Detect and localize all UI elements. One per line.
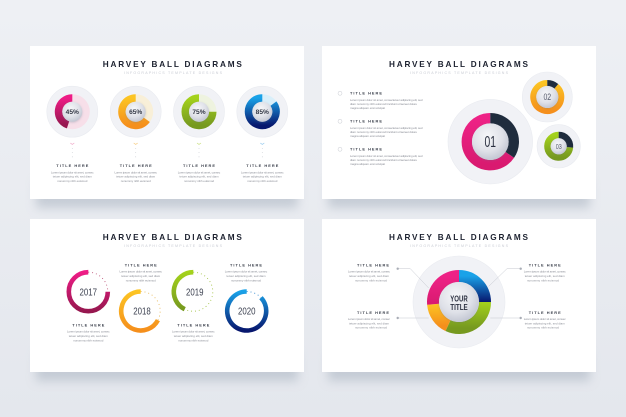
text block 4: Lorem ipsum dolor sit amet, consec [241,170,284,174]
text block 2018 [119,263,162,282]
panel: numbered balls [322,46,596,199]
text block 2017: TITLE HERE [72,322,105,327]
ring: 2020 [227,292,266,331]
text block top right: nonummy nibh euismod [527,278,559,282]
text block 2: TITLE HERE [120,163,152,168]
text block 3: nonummy nibh euismod [184,179,214,183]
ball: 03: 03 [556,142,562,151]
text block 2019: tetuer adipiscing elit, sed diam [174,334,213,338]
ball: 85% [237,86,288,137]
connector lines [396,256,522,348]
panel shadows [36,180,590,381]
text block bottom right: nonummy nibh euismod [527,326,559,330]
ring: 2018 [121,291,160,330]
subheading: INFOGRAPHICS TEMPLATE DESIGNS [410,244,509,248]
text block 4: tetuer adipiscing elit, sed diam [243,175,282,179]
text block top left: tetuer adipiscing elit, sed diam [349,274,390,278]
text block 2019: nonummy nibh euismod [178,338,209,342]
center ball [439,282,479,322]
text block top right: tetuer adipiscing elit, sed diam [525,274,565,278]
subheading: INFOGRAPHICS TEMPLATE DESIGNS [124,71,223,75]
list item 2: diam nonummy nibh euismod tincidunt ut laoreet dolore [350,130,417,134]
text block top right: TITLE HERE [529,263,561,268]
ring: 2018: 2018 [133,306,151,318]
text block bottom right [524,310,566,330]
text block 2019: Lorem ipsum dolor sit amet, consec [172,330,215,334]
list item 3 [338,147,423,166]
text block bottom left: tetuer adipiscing elit, sed diam [349,321,390,325]
ball: 65% [110,86,161,137]
text block 2: nonummy nibh euismod [121,179,151,183]
center ball: YOUR [450,294,468,304]
text block 3 [178,163,221,183]
text block bottom left: TITLE HERE [357,310,389,315]
text block bottom left: nonummy nibh euismod [355,326,387,330]
text block 2019: TITLE HERE [177,322,210,327]
text block 4: TITLE HERE [246,163,279,168]
subheading: INFOGRAPHICS TEMPLATE DESIGNS [124,244,223,248]
ball: 45% [47,86,98,137]
heading: HARVEY BALL DIAGRAMS [389,233,529,242]
list item 2: magna aliquam erat volutpat [350,134,385,138]
list item 1: diam nonummy nibh euismod tincidunt ut laoreet dolore [350,102,417,106]
text block 2020: tetuer adipiscing elit, sed diam [226,274,266,278]
text block 2020 [225,263,268,282]
text block bottom right: Lorem ipsum dolor sit amet, consec [524,317,566,321]
text block 2: Lorem ipsum dolor sit amet, consec [114,170,157,174]
text block top left: nonummy nibh euismod [355,278,387,282]
text block top right [524,263,566,282]
text block 2018: Lorem ipsum dolor sit amet, consec [119,270,162,274]
heading: HARVEY BALL DIAGRAMS [103,60,242,69]
ring: 2019 [174,272,213,311]
text block 2 [114,163,157,183]
ball: 01: 01 [485,134,496,151]
list item 3: TITLE HERE [350,147,382,152]
list item 1 [338,91,423,110]
text block 4: nonummy nibh euismod [247,179,278,183]
ball: 75% [174,86,224,137]
list item 1: TITLE HERE [350,91,382,96]
ring: 2019: 2019 [186,287,204,298]
ball: 65%: 65% [129,109,143,116]
text block 2018: TITLE HERE [125,263,157,268]
text block 2020: Lorem ipsum dolor sit amet, consec [225,270,268,274]
text block 4 [241,163,284,183]
list item 3: magna aliquam erat volutpat [350,162,385,166]
list item 3: diam nonummy nibh euismod tincidunt ut laoreet dolore [350,158,417,162]
panel: segmented ball [322,219,596,372]
ball: 85%: 85% [256,109,269,116]
text block 2017: nonummy nibh euismod [73,338,104,342]
text block bottom left [348,310,391,330]
text block 3: TITLE HERE [183,163,215,168]
text block 1: nonummy nibh euismod [57,179,88,183]
text block top left: Lorem ipsum dolor sit amet, consec [348,270,391,274]
text block 2020: nonummy nibh euismod [231,278,261,282]
text block top left [348,263,391,282]
ball: 45%: 45% [66,109,79,116]
heading: HARVEY BALL DIAGRAMS [389,60,529,69]
text block 2017: Lorem ipsum dolor sit amet, consec [67,330,110,334]
list item 1: Lorem ipsum dolor sit amet, consectetuer adipiscing elit, sed [350,98,423,102]
list item 2 [338,119,423,138]
connectors [70,143,264,158]
segmented ring [433,276,485,328]
text block 2019 [172,322,215,342]
text block 2: tetuer adipiscing elit, sed diam [116,175,156,179]
text block 1: Lorem ipsum dolor sit amet, consec [51,170,94,174]
text block 2017: tetuer adipiscing elit, sed diam [69,334,108,338]
text block 2018: nonummy nibh euismod [126,278,156,282]
center ball: TITLE [450,302,468,312]
text block bottom left: Lorem ipsum dolor sit amet, consec [348,317,391,321]
text block bottom right: tetuer adipiscing elit, sed diam [525,321,565,325]
ring: 2020: 2020 [238,306,256,318]
heading: HARVEY BALL DIAGRAMS [103,233,242,242]
ball: 02: 02 [543,92,551,102]
list item 2: Lorem ipsum dolor sit amet, consectetuer adipiscing elit, sed [350,126,423,130]
ring: 2017: 2017 [80,287,97,298]
ball: 01 [448,99,533,184]
list item 2: TITLE HERE [350,119,382,124]
text block bottom right: TITLE HERE [529,310,561,315]
ball: 75%: 75% [192,109,206,116]
panel: timeline [30,219,304,372]
text block top left: TITLE HERE [357,263,389,268]
ring: 2017 [69,272,108,311]
text block 1 [51,163,94,183]
ball: 03 [537,125,580,168]
text block 3: Lorem ipsum dolor sit amet, consec [178,170,221,174]
text block 2018: tetuer adipiscing elit, sed diam [121,274,161,278]
text block 1: tetuer adipiscing elit, sed diam [53,175,92,179]
text block 1: TITLE HERE [56,163,89,168]
text block top right: Lorem ipsum dolor sit amet, consec [524,270,566,274]
text block 2017 [67,322,110,342]
list item 3: Lorem ipsum dolor sit amet, consectetuer adipiscing elit, sed [350,154,423,158]
subheading: INFOGRAPHICS TEMPLATE DESIGNS [410,71,509,75]
text block 2020: TITLE HERE [230,263,262,268]
panel: percentages [30,46,304,199]
list item 1: magna aliquam erat volutpat [350,106,385,110]
text block 3: tetuer adipiscing elit, sed diam [180,175,219,179]
ball: 02 [522,72,572,122]
